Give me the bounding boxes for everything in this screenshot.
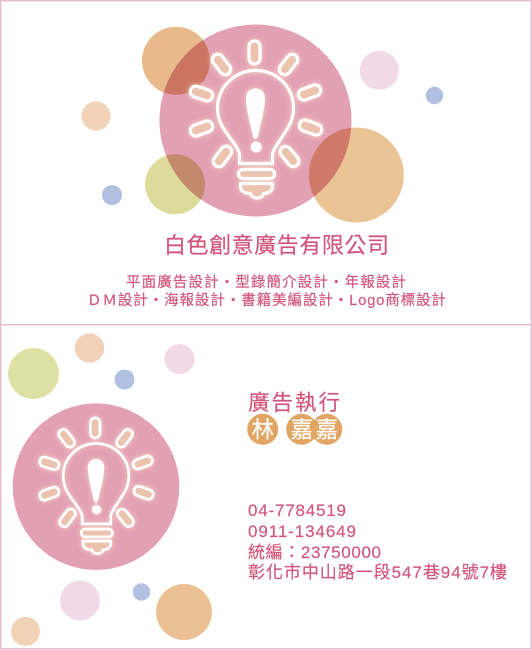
- blue circle left: [102, 185, 122, 205]
- card back border: [1, 325, 531, 649]
- bubble group: back decoration: [8, 333, 212, 646]
- bubble group: front logo: [82, 24, 443, 222]
- services line 1: 平面廣告設計・型錄簡介設計・年報設計: [126, 273, 406, 291]
- address: 彰化市中山路一段547巷94號7樓: [248, 563, 507, 582]
- peach circle: [82, 102, 110, 130]
- pink circle top: [164, 344, 194, 374]
- telephone: 04-7784519: [248, 501, 346, 520]
- badge: given name 2: 嘉: [315, 418, 338, 442]
- peach circle bottom: [11, 617, 40, 646]
- job title: 廣告執行: [248, 391, 340, 415]
- company name: 白色創意廣告有限公司: [164, 233, 389, 258]
- green circle: [8, 348, 59, 399]
- blue circle bottom: [133, 583, 150, 601]
- icon: light bulb with exclamation mark: [189, 41, 323, 198]
- mobile: 0911-134649: [248, 522, 356, 541]
- card front border: [1, 1, 531, 325]
- blue circle top: [114, 370, 134, 390]
- icon: light bulb with exclamation mark: [38, 418, 155, 554]
- main pink circle: [13, 403, 179, 570]
- badge: family name: 林: [251, 418, 274, 442]
- services line 2: ＤＭ設計・海報設計・書籍美編設計・Logo商標設計: [87, 292, 446, 309]
- name badges: [247, 414, 342, 445]
- blue circle right: [426, 87, 443, 104]
- peach circle top: [75, 333, 104, 363]
- main pink circle: [160, 24, 352, 216]
- orange circle top left: [142, 27, 210, 95]
- green circle: [145, 154, 205, 214]
- panel: business card front: [1, 1, 531, 325]
- pink circle bottom: [60, 580, 100, 620]
- orange circle bottom: [156, 584, 212, 640]
- large orange circle: [309, 128, 404, 222]
- panel: business card back: [1, 325, 531, 649]
- contact details: [248, 501, 507, 582]
- pink circle: [360, 51, 399, 90]
- badge: given name 1: 嘉: [290, 418, 313, 442]
- tax id: 統編：23750000: [248, 543, 381, 562]
